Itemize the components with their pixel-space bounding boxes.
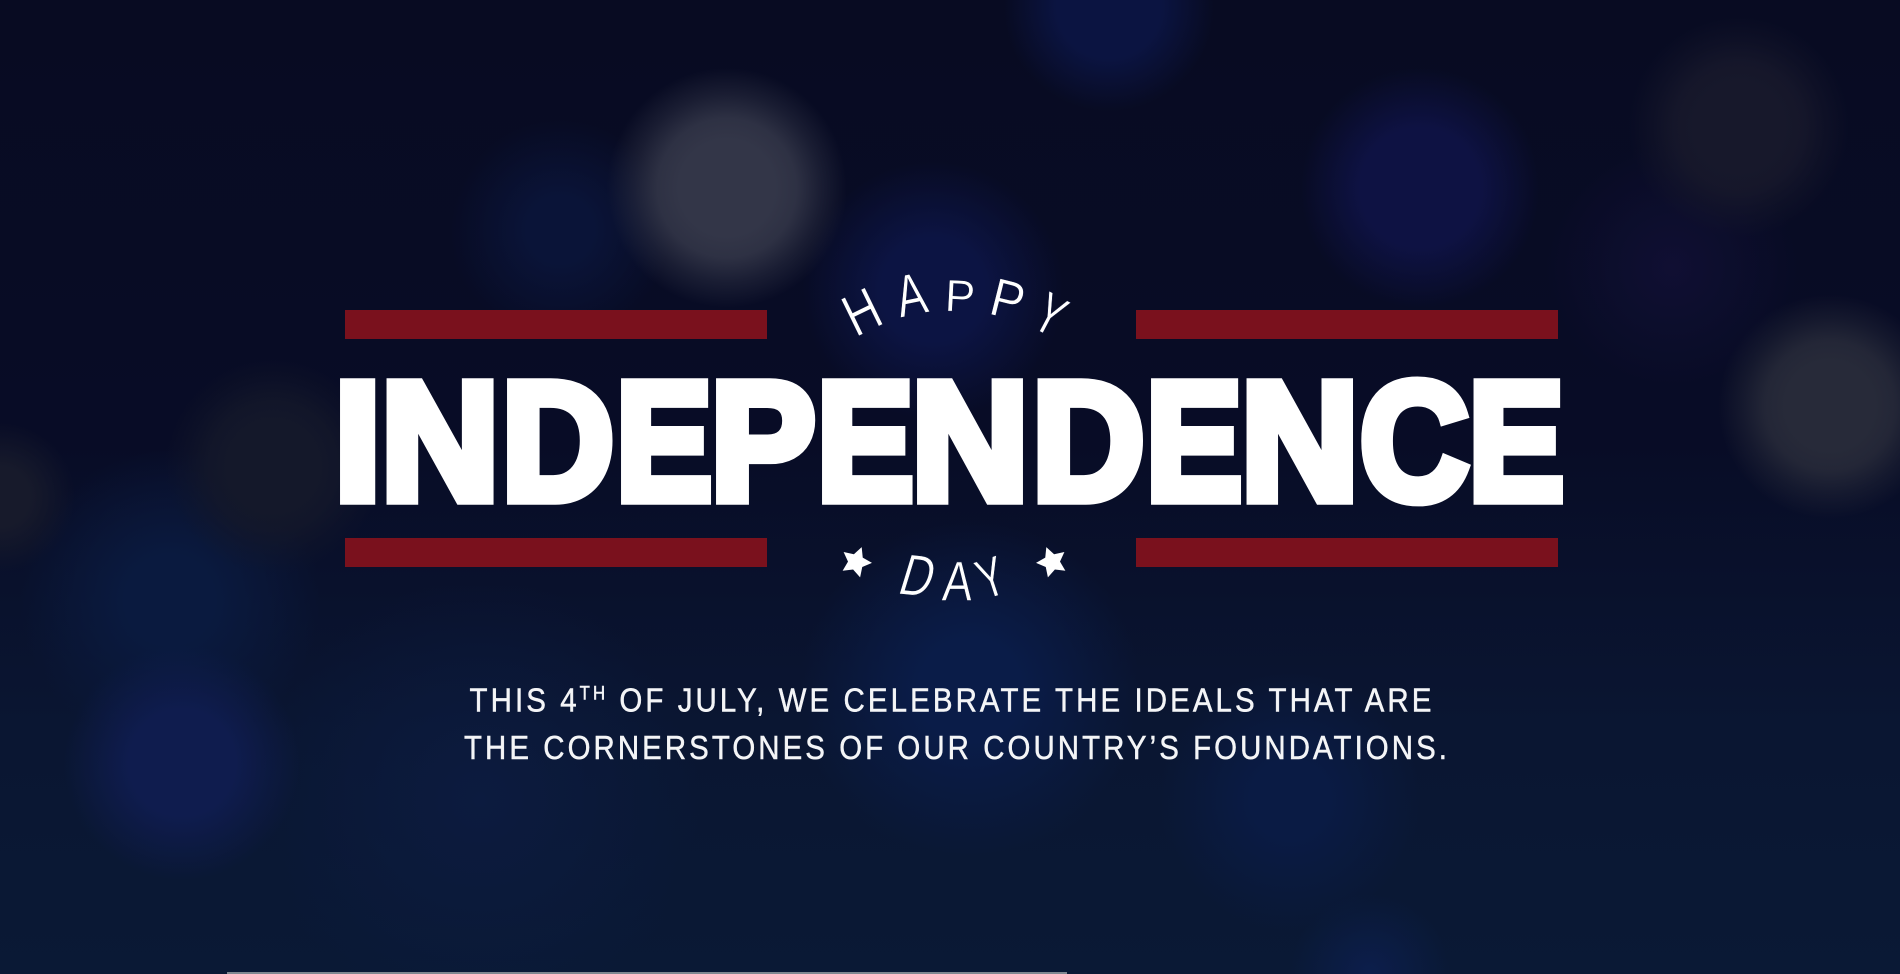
heading: independence: C xyxy=(1360,347,1469,535)
heading: independence: E xyxy=(616,347,712,535)
left top red bar xyxy=(345,310,766,339)
heading: happy: H xyxy=(832,274,892,349)
heading: independence: E xyxy=(1469,347,1564,535)
right top red bar xyxy=(1136,310,1558,339)
heading: independence: D xyxy=(1032,347,1144,535)
heading: day: A xyxy=(941,549,975,613)
left bottom red bar xyxy=(345,538,766,567)
text block: tagline: THIS 4 xyxy=(470,682,595,720)
text block: tagline xyxy=(464,682,1450,767)
text block: tagline: TH xyxy=(580,684,608,704)
heading: day: Y xyxy=(968,543,1013,612)
heading: happy: P xyxy=(944,270,976,322)
icon: left star xyxy=(842,547,872,578)
heading: happy: Y xyxy=(1024,279,1078,350)
heading: happy: A xyxy=(890,259,932,330)
heading: independence: E xyxy=(1146,347,1242,535)
heading: independence: P xyxy=(711,347,815,535)
icon: right star xyxy=(1036,547,1066,578)
heading: independence: N xyxy=(911,347,1029,535)
heading: independence: E xyxy=(817,347,913,535)
heading: day: D xyxy=(892,542,944,609)
heading: independence: N xyxy=(1241,347,1359,535)
heading: happy: P xyxy=(984,266,1031,333)
heading: day xyxy=(892,542,1013,613)
right bottom red bar xyxy=(1136,538,1558,567)
heading: happy xyxy=(832,259,1078,350)
heading: independence: D xyxy=(502,347,614,535)
heading: independence: I xyxy=(334,347,381,535)
heading: independence xyxy=(334,347,1564,535)
heading: independence: N xyxy=(381,347,499,535)
bottom edge line xyxy=(227,972,1067,974)
